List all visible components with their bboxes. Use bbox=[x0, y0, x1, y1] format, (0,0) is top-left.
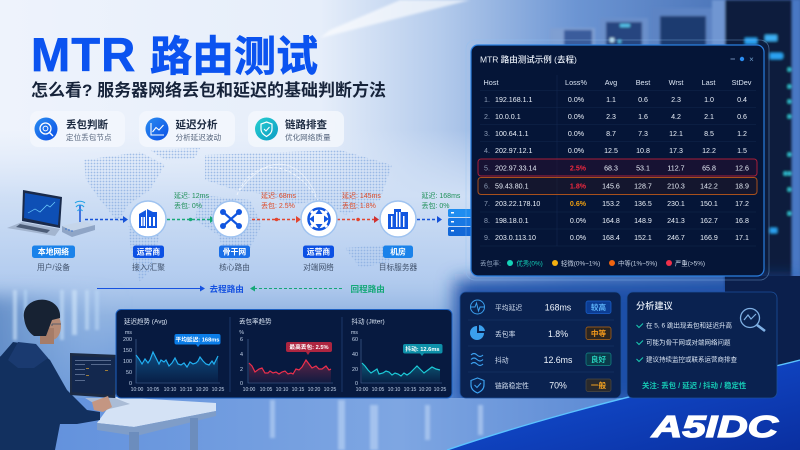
row 9: 9. bbox=[484, 234, 490, 242]
node label: carrier: 接入/汇聚 bbox=[132, 262, 165, 272]
person at laptop bbox=[0, 300, 216, 450]
hop metric: 145ms: 丢包: 1.8% bbox=[342, 201, 376, 210]
hop metric: 68ms bbox=[261, 191, 297, 210]
row 7: 230.1 bbox=[667, 200, 685, 208]
row 5 highlighted: 202.97.33.14 bbox=[495, 164, 536, 172]
hop metric: 68ms: 丢包: 2.5% bbox=[261, 201, 295, 210]
chart: packet loss trend: 0 bbox=[240, 381, 243, 387]
advice item 2: 可能为骨干网或对端网络问题 bbox=[646, 338, 731, 346]
node: backbone bbox=[213, 201, 249, 237]
row 7: 0.6% bbox=[570, 200, 587, 208]
chart: latency trend: 50 bbox=[126, 370, 132, 376]
row 8: 241.3 bbox=[667, 217, 685, 225]
table header bbox=[484, 78, 752, 87]
panel: analysis advice bbox=[627, 292, 777, 398]
row 4 bbox=[484, 147, 747, 155]
row 4: 10.8 bbox=[636, 147, 650, 155]
row 9: 203.0.113.10 bbox=[495, 234, 536, 242]
node label: peer carrier: 运营商 bbox=[307, 247, 330, 257]
row 1: 1.0 bbox=[704, 96, 714, 104]
row 9 bbox=[484, 234, 749, 242]
row 4: 1.5 bbox=[737, 147, 747, 155]
table header: StDev bbox=[732, 78, 752, 87]
row 6 highlighted: 18.9 bbox=[735, 182, 749, 190]
table header: Wrst bbox=[669, 78, 683, 87]
chart: packet loss trend: % bbox=[239, 330, 244, 336]
node label: peer carrier bbox=[303, 246, 334, 272]
chart: latency trend: 延迟趋势 (Avg) bbox=[124, 316, 167, 326]
row 9: 246.7 bbox=[667, 234, 685, 242]
chip: latency: 延迟分析 bbox=[176, 118, 218, 131]
row 7: 136.5 bbox=[634, 200, 652, 208]
row 5 highlighted: 53.1 bbox=[636, 164, 650, 172]
chart: packet loss trend: 10:10 bbox=[276, 387, 289, 393]
stat: packet loss: 中等 bbox=[591, 328, 606, 338]
table header: Avg bbox=[605, 78, 617, 87]
loss legend: 优秀(0%) bbox=[516, 258, 543, 268]
chart: latency trend: 200 bbox=[123, 337, 132, 343]
table header: Host bbox=[484, 78, 499, 87]
world map backdrop bbox=[84, 148, 392, 282]
row 8: 164.8 bbox=[602, 217, 620, 225]
node: data center bbox=[380, 201, 416, 237]
row 7: 17.2 bbox=[735, 200, 749, 208]
row 6 highlighted: 142.2 bbox=[700, 182, 718, 190]
table title: MTR 路由测试示例 (去程) bbox=[480, 54, 577, 64]
row 1: 0.4 bbox=[737, 96, 747, 104]
node label: carrier bbox=[132, 246, 165, 272]
route direction legend bbox=[97, 283, 385, 294]
hop metric: 168ms: 延迟: 168ms bbox=[422, 191, 461, 200]
stat: packet loss bbox=[470, 325, 611, 340]
hop metric: 145ms bbox=[342, 191, 381, 210]
row 9: 17.1 bbox=[735, 234, 749, 242]
tooltip: average latency: 平均延迟: 168ms bbox=[176, 336, 219, 344]
node label: backbone bbox=[219, 246, 250, 272]
row 5 highlighted: 2.5% bbox=[570, 164, 587, 172]
window controls: × bbox=[749, 55, 754, 64]
row 5 highlighted: 5. bbox=[484, 164, 490, 172]
row 2: 2.3 bbox=[606, 113, 616, 121]
chart: latency trend: ms bbox=[125, 330, 132, 336]
chart: packet loss trend bbox=[239, 316, 337, 393]
focus note: 关注: 丢包 / 延迟 / 抖动 / 稳定性 bbox=[642, 381, 747, 390]
node label: local network: 用户/设备 bbox=[37, 262, 70, 272]
chart: latency trend: 0 bbox=[129, 381, 132, 387]
chart: latency trend: 10:25 bbox=[212, 387, 225, 393]
stat: link stability: 70% bbox=[549, 380, 567, 390]
row 9: 168.4 bbox=[602, 234, 620, 242]
chart: jitter trend: 10:05 bbox=[372, 387, 385, 393]
row 8 bbox=[484, 217, 749, 225]
stat: link stability bbox=[471, 378, 611, 393]
chart: latency trend bbox=[123, 316, 225, 393]
row 1: 192.168.1.1 bbox=[495, 96, 533, 104]
row 3: 0.0% bbox=[568, 130, 585, 138]
stat: packet loss: 1.8% bbox=[548, 329, 568, 339]
chart: latency trend: 10:15 bbox=[180, 387, 193, 393]
row 7: 150.1 bbox=[700, 200, 718, 208]
chart: packet loss trend: 10:25 bbox=[324, 387, 337, 393]
row 4: 12.2 bbox=[702, 147, 716, 155]
chart: packet loss trend: 6 bbox=[240, 337, 243, 343]
node label: data center bbox=[379, 246, 418, 272]
chart: jitter trend: 抖动 (Jitter) bbox=[352, 316, 385, 326]
row 5 highlighted: 65.8 bbox=[702, 164, 716, 172]
row 5 highlighted: 68.3 bbox=[604, 164, 618, 172]
row 6 highlighted: 145.6 bbox=[602, 182, 620, 190]
stat: link stability: 链路稳定性 bbox=[495, 381, 529, 390]
row 2 bbox=[484, 113, 747, 121]
bottom right brand swoosh bbox=[447, 360, 800, 450]
row 6 highlighted: 210.3 bbox=[667, 182, 685, 190]
row 5 highlighted bbox=[478, 159, 757, 176]
row 3: 3. bbox=[484, 130, 490, 138]
row 8: 16.8 bbox=[735, 217, 749, 225]
chart: packet loss trend: 4 bbox=[240, 352, 243, 358]
row 6 highlighted: 1.8% bbox=[570, 182, 587, 190]
subtitle: 怎么看? 服务器网络丢包和延迟的基础判断方法 bbox=[31, 80, 386, 100]
hop metric: 68ms: 延迟: 68ms bbox=[261, 191, 297, 200]
chart: packet loss trend: 2 bbox=[240, 367, 243, 373]
chart: jitter trend: 10:00 bbox=[356, 387, 369, 393]
window controls bbox=[730, 55, 754, 64]
stat: jitter: 12.6ms bbox=[544, 355, 573, 365]
row 2: 0.6 bbox=[737, 113, 747, 121]
row 2: 10.0.0.1 bbox=[495, 113, 521, 121]
chip: latency bbox=[139, 111, 235, 147]
row 9: 152.1 bbox=[634, 234, 652, 242]
panel: MTR results table bbox=[466, 40, 769, 280]
row 9: 166.9 bbox=[700, 234, 718, 242]
stat: jitter: 良好 bbox=[591, 354, 606, 364]
row 1: 2.3 bbox=[671, 96, 681, 104]
row 6 highlighted: 128.7 bbox=[634, 182, 652, 190]
loss legend: 中等(1%~5%) bbox=[618, 258, 657, 268]
row 1 bbox=[484, 96, 747, 104]
row 8: 0.0% bbox=[570, 217, 587, 225]
chart: packet loss trend: 10:00 bbox=[243, 387, 256, 393]
hop metric: 12ms: 丢包: 0% bbox=[174, 201, 202, 210]
chart: latency trend: 10:10 bbox=[164, 387, 177, 393]
route arrows bbox=[85, 216, 442, 223]
row 2: 2.1 bbox=[704, 113, 714, 121]
chart: jitter trend: 10:20 bbox=[419, 387, 432, 393]
chart: latency trend: 10:05 bbox=[147, 387, 160, 393]
chip: packet loss: 定位丢包节点 bbox=[66, 132, 112, 142]
row 8: 198.18.0.1 bbox=[495, 217, 529, 225]
row 7 bbox=[484, 200, 749, 208]
row 2: 2. bbox=[484, 113, 490, 121]
row 4: 4. bbox=[484, 147, 490, 155]
hop metric: 12ms: 延迟: 12ms bbox=[174, 191, 210, 200]
chart: jitter trend bbox=[351, 316, 447, 393]
node label: backbone: 骨干网 bbox=[223, 248, 246, 257]
chip: link check: 链路排查 bbox=[285, 118, 327, 131]
loss legend: 严重(>5%) bbox=[675, 260, 705, 268]
row 3: 100.64.1.1 bbox=[495, 130, 529, 138]
chart: latency trend: 10:20 bbox=[196, 387, 209, 393]
node label: local network bbox=[32, 246, 75, 272]
node: peer carrier bbox=[301, 201, 337, 237]
stat: average latency: 平均延迟 bbox=[495, 303, 522, 312]
icon: laptop and router bbox=[7, 190, 95, 237]
row 2: 0.0% bbox=[568, 113, 585, 121]
loss legend: 丢包率: bbox=[480, 258, 501, 268]
row 9: 0.0% bbox=[570, 234, 587, 242]
panel: summary stats bbox=[460, 292, 621, 398]
title: MTR bbox=[31, 28, 136, 81]
advice item 1: 在 5, 6 跳出现丢包和延迟升高 bbox=[646, 320, 732, 330]
chart: jitter trend: 10:15 bbox=[404, 387, 417, 393]
tooltip: peak loss: 最高丢包: 2.5% bbox=[289, 343, 329, 351]
logo: A5IDC: A5IDC bbox=[651, 409, 779, 444]
table header: Best bbox=[636, 78, 650, 87]
row 5 highlighted: 112.7 bbox=[667, 164, 685, 172]
advice heading: 分析建议 bbox=[636, 300, 673, 311]
row 4: 0.0% bbox=[568, 147, 585, 155]
feature chips bbox=[30, 111, 344, 147]
hop metric: 168ms: 丢包: 0% bbox=[422, 201, 450, 210]
tooltip: jitter: 抖动: 12.6ms bbox=[405, 345, 440, 353]
route direction legend: 去程路由 bbox=[210, 283, 244, 294]
row 3: 8.5 bbox=[704, 130, 714, 138]
loss legend bbox=[480, 258, 705, 268]
chip: link check: 优化网络质量 bbox=[285, 132, 331, 142]
chip: packet loss bbox=[30, 111, 125, 147]
row 4: 12.5 bbox=[604, 147, 618, 155]
node label: data center: 机房 bbox=[390, 247, 406, 257]
stat: jitter bbox=[471, 353, 611, 366]
panel: trend charts bbox=[116, 310, 452, 398]
chart: latency trend: 150 bbox=[123, 348, 132, 354]
row 1: 1. bbox=[484, 96, 490, 104]
node label: peer carrier: 对端网络 bbox=[303, 262, 334, 272]
stat: link stability: 一般 bbox=[591, 380, 606, 390]
loss legend: 轻微(0%~1%) bbox=[561, 258, 600, 268]
row 1: 0.6 bbox=[638, 96, 648, 104]
row 7: 153.2 bbox=[602, 200, 620, 208]
hop metric: 168ms bbox=[422, 191, 461, 210]
chip: latency: 分析延迟波动 bbox=[176, 132, 221, 142]
row 2: 1.6 bbox=[638, 113, 648, 121]
route direction legend: 回程路由 bbox=[350, 283, 385, 294]
row 3: 8.7 bbox=[606, 130, 616, 138]
icon: target server bbox=[448, 209, 472, 236]
chart: jitter trend: 40 bbox=[352, 352, 358, 358]
hop metric: 12ms bbox=[174, 191, 210, 210]
row 3: 1.2 bbox=[737, 130, 747, 138]
row 2: 4.2 bbox=[671, 113, 681, 121]
row 8: 148.9 bbox=[634, 217, 652, 225]
row 3 bbox=[484, 130, 747, 138]
stat: average latency: 较高 bbox=[591, 302, 606, 312]
chart: jitter trend: ms bbox=[351, 330, 358, 336]
chart: jitter trend: 10:10 bbox=[388, 387, 401, 393]
chart: jitter trend: 20 bbox=[352, 367, 358, 373]
chart: packet loss trend: 10:05 bbox=[260, 387, 273, 393]
advice item 3: 建议持续监控或联系运营商排查 bbox=[646, 354, 738, 364]
row 7: 7. bbox=[484, 200, 490, 208]
title: 路由测试 bbox=[150, 33, 318, 80]
stat: jitter: 抖动 bbox=[495, 356, 509, 364]
node label: local network: 本地网络 bbox=[38, 247, 69, 257]
row 5 highlighted: 12.6 bbox=[735, 164, 749, 172]
row 6 highlighted bbox=[478, 178, 757, 194]
chart: packet loss trend: 10:15 bbox=[292, 387, 305, 393]
icon: magnifier chart bbox=[740, 308, 765, 331]
hop metric: 145ms: 延迟: 145ms bbox=[342, 191, 381, 200]
node label: backbone: 核心路由 bbox=[219, 262, 250, 272]
row 1: 0.0% bbox=[568, 96, 585, 104]
advice item 1 bbox=[636, 320, 732, 330]
stat: average latency: 168ms bbox=[545, 302, 572, 312]
table grid bbox=[480, 75, 756, 246]
table header: Loss% bbox=[565, 78, 587, 87]
chart: packet loss trend: 丢包率趋势 bbox=[239, 316, 272, 326]
row 7: 203.22.178.10 bbox=[495, 200, 540, 208]
chart: jitter trend: 0 bbox=[355, 381, 358, 387]
chart: jitter trend: 60 bbox=[352, 337, 358, 343]
chart: latency trend: 100 bbox=[123, 359, 132, 365]
advice item 2 bbox=[636, 338, 731, 346]
chart: packet loss trend: 10:20 bbox=[308, 387, 321, 393]
chip: link check bbox=[248, 111, 344, 147]
chart: latency trend: 10:00 bbox=[131, 387, 144, 393]
chip: packet loss: 丢包判断 bbox=[66, 118, 108, 131]
node label: carrier: 运营商 bbox=[137, 247, 160, 257]
table header: Last bbox=[702, 78, 715, 87]
chart: jitter trend: 10:25 bbox=[434, 387, 447, 393]
node: carrier access bbox=[130, 201, 166, 237]
row 4: 202.97.12.1 bbox=[495, 147, 533, 155]
row 6 highlighted: 59.43.80.1 bbox=[495, 182, 529, 190]
row 8: 8. bbox=[484, 217, 490, 225]
row 3: 7.3 bbox=[638, 130, 648, 138]
row 1: 1.1 bbox=[606, 96, 616, 104]
row 4: 17.3 bbox=[669, 147, 683, 155]
row 8: 162.7 bbox=[700, 217, 718, 225]
stat: average latency bbox=[470, 300, 611, 314]
row 6 highlighted: 6. bbox=[484, 182, 490, 190]
row 3: 12.1 bbox=[669, 130, 683, 138]
stat: packet loss: 丢包率 bbox=[495, 330, 516, 338]
node label: data center: 目标服务器 bbox=[379, 262, 418, 272]
